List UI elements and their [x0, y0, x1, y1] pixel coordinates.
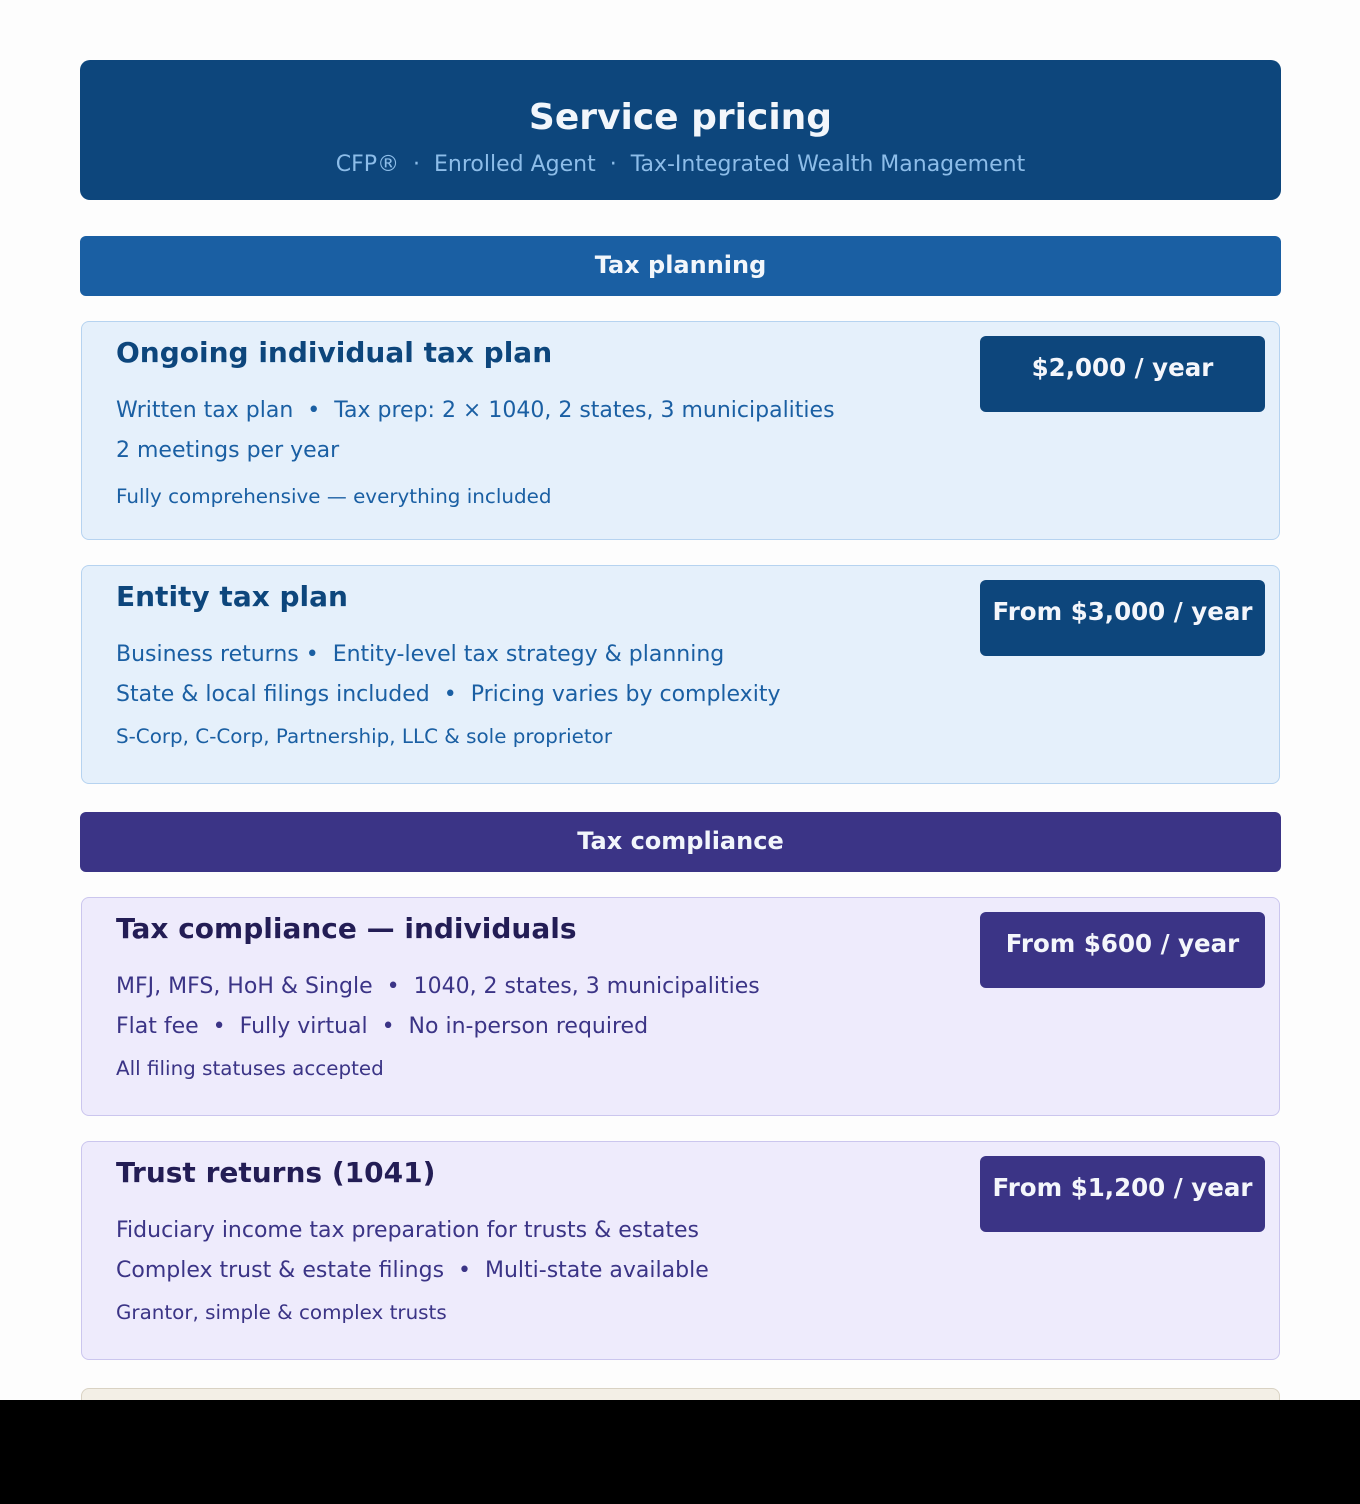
card details: Business returns • Entity-level tax strategy & planning: [116, 642, 724, 667]
card details: Written tax plan • Tax prep: 2 × 1040, 2 states, 3 municipalities: [116, 398, 835, 423]
price badge: From $1,200 / year: [993, 1173, 1252, 1202]
card title: Trust returns (1041): [116, 1156, 435, 1189]
black footer band: [0, 1400, 1360, 1504]
card: trust returns: Grantor, simple & complex trusts: [116, 1301, 447, 1324]
card title: Entity tax plan: [116, 580, 348, 613]
price badge: [980, 912, 1265, 988]
card: trust returns: Complex trust & estate filings • Multi-state available: [116, 1258, 709, 1283]
card: partial beige: [81, 1388, 1280, 1448]
card details: Fiduciary income tax preparation for trusts & estates: [116, 1218, 699, 1243]
price badge: From $600 / year: [1006, 929, 1239, 958]
price badge: [980, 336, 1265, 412]
section bar: tax planning: Tax planning: [595, 251, 766, 279]
price badge: $2,000 / year: [1032, 353, 1213, 382]
section bar: tax planning: [80, 236, 1281, 296]
card: ongoing individual tax plan: 2 meetings per year: [116, 438, 339, 463]
card title: Tax compliance — individuals: [116, 912, 577, 945]
card: individuals: [81, 897, 1280, 1116]
section bar: tax compliance: [80, 812, 1281, 872]
card: trust returns: [81, 1141, 1280, 1360]
card details: MFJ, MFS, HoH & Single • 1040, 2 states, 3 municipalities: [116, 974, 760, 999]
card: individuals: Flat fee • Fully virtual • No in-person required: [116, 1014, 648, 1039]
card: entity tax plan: S-Corp, C-Corp, Partnership, LLC & sole proprietor: [116, 725, 612, 748]
card: entity tax plan: State & local filings included • Pricing varies by complexity: [116, 682, 780, 707]
card title: Ongoing individual tax plan: [116, 336, 552, 369]
section bar: tax compliance: Tax compliance: [577, 827, 784, 855]
card: ongoing individual tax plan: [81, 321, 1280, 540]
card: ongoing individual tax plan: Fully comprehensive — everything included: [116, 485, 551, 508]
title: Service pricing: [529, 97, 832, 138]
price badge: [980, 1156, 1265, 1232]
card: entity tax plan: [81, 565, 1280, 784]
card: individuals: All filing statuses accepted: [116, 1057, 384, 1080]
subtitle: CFP® · Enrolled Agent · Tax-Integrated Wealth Management: [336, 152, 1025, 177]
price badge: [980, 580, 1265, 656]
header: [80, 60, 1281, 200]
price badge: From $3,000 / year: [993, 597, 1252, 626]
